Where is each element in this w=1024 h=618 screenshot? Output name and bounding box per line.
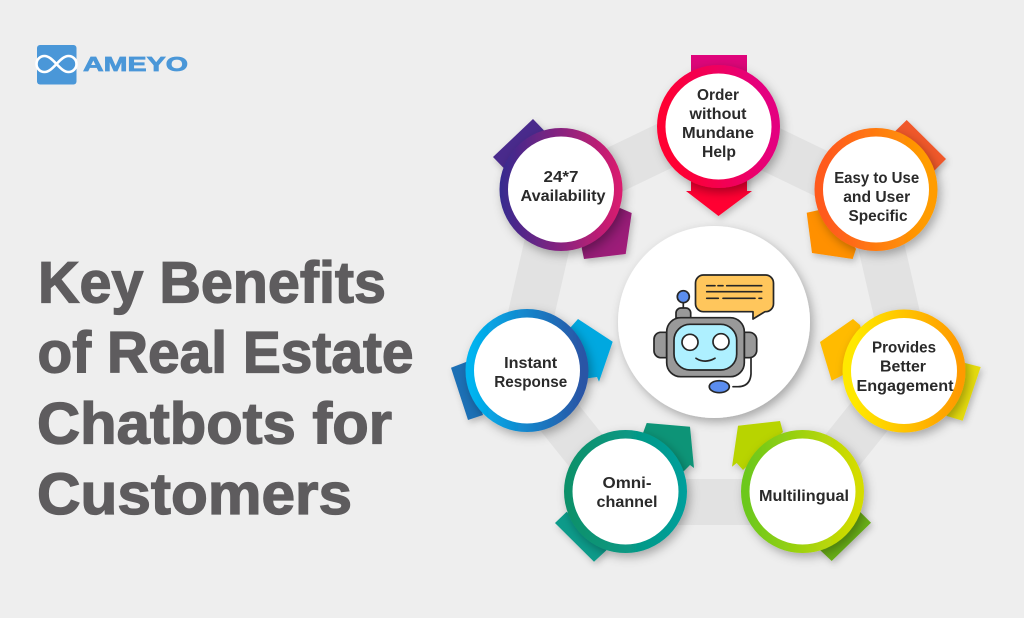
arrow: down head xyxy=(686,170,752,216)
arrow: head xyxy=(820,319,870,381)
ring xyxy=(741,430,864,553)
title: Key Benefits xyxy=(38,250,386,315)
label: and User xyxy=(843,189,910,206)
benefit: 24*7 Availability xyxy=(493,119,632,259)
logo xyxy=(36,45,188,84)
label: Easy to Use xyxy=(834,170,919,187)
title: Customers xyxy=(37,462,352,527)
label xyxy=(520,169,606,205)
label: Response xyxy=(494,374,567,391)
title xyxy=(37,250,414,527)
ring xyxy=(842,310,966,432)
title: of Real Estate xyxy=(38,321,414,386)
arrow: top tail xyxy=(691,55,747,85)
arrow: head xyxy=(807,210,856,259)
label xyxy=(834,170,919,225)
label: without xyxy=(688,106,747,123)
label: Specific xyxy=(848,208,908,225)
arrow: tail xyxy=(555,512,607,562)
label xyxy=(494,355,567,391)
label: Provides xyxy=(872,340,936,357)
label: Multilingual xyxy=(759,488,849,505)
benefit: Provides Better Engagement xyxy=(820,310,981,432)
title: Chatbots for xyxy=(37,391,392,456)
ring xyxy=(564,430,687,553)
benefit: Instant Response xyxy=(451,309,613,432)
label xyxy=(682,87,754,161)
label: 24*7 xyxy=(544,169,579,186)
label: Instant xyxy=(504,355,558,372)
label xyxy=(856,340,954,395)
label xyxy=(596,475,658,511)
benefit: Easy to Use and User Specific xyxy=(807,120,946,259)
ring xyxy=(500,128,622,251)
label: Availability xyxy=(520,188,606,205)
arrow: tail xyxy=(940,363,981,421)
benefit: Multilingual xyxy=(732,421,871,561)
arrow: tail xyxy=(493,119,560,185)
label: Engagement xyxy=(856,378,954,395)
heptagon connector band xyxy=(519,122,909,502)
icon: robot chatbot xyxy=(654,275,774,393)
label: Mundane xyxy=(682,125,754,142)
label: Help xyxy=(702,144,736,161)
label: Better xyxy=(880,359,926,376)
logo: AMEYO xyxy=(83,54,188,76)
arrow: tail xyxy=(880,120,946,185)
benefit: Omni-channel xyxy=(555,423,694,562)
ring xyxy=(466,309,588,432)
arrow: head xyxy=(570,319,613,382)
arrow: head xyxy=(582,208,632,259)
arrow: head xyxy=(643,423,694,472)
arrow: head xyxy=(732,421,783,470)
label: channel xyxy=(596,494,658,511)
label: Omni- xyxy=(602,475,652,492)
ring xyxy=(814,128,938,251)
arrow: tail xyxy=(820,512,871,561)
label: Order xyxy=(697,87,739,104)
arrow: tail xyxy=(451,362,483,420)
ring xyxy=(657,65,780,188)
central circle with robot xyxy=(618,226,810,418)
benefit: Order without Mundane Help xyxy=(657,55,780,216)
